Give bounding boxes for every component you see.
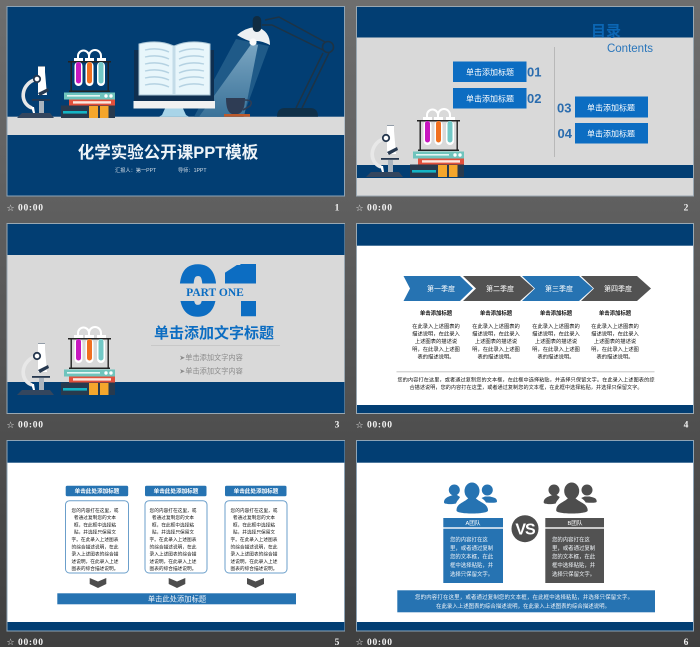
item 01: 01 — [527, 64, 541, 80]
team A card: 框中选择粘贴，并 — [450, 561, 494, 569]
big number 01: 0 — [179, 253, 217, 329]
column B: 的综合描述说明，在此 — [150, 543, 197, 550]
footer: slide 3: 3 — [335, 420, 340, 430]
icon: light beam — [194, 39, 269, 117]
team B card — [545, 518, 604, 583]
footer band — [8, 622, 344, 630]
column 4: 描述说明，在此录入 — [591, 330, 640, 338]
column C: 的综合描述说明，在此 — [231, 543, 278, 550]
bottom summary bar: 您的内容打在这里，或者通过复制您的文本框，在此框中选择粘贴，并选择只保留文字。 — [415, 593, 633, 601]
item 04: 单击添加标题 — [587, 128, 635, 138]
footer: slide 1: ☆ — [6, 204, 15, 214]
chevron 2: 第二季度 — [486, 284, 514, 293]
column A: 者通过复制您的文本 — [74, 514, 116, 521]
item 03: 单击添加标题 — [587, 102, 635, 112]
footer: slide 3: 00:00 — [18, 420, 44, 430]
icon: microscope, test tubes and books — [17, 50, 115, 118]
icon: microscope, test tubes and books — [17, 327, 115, 395]
column B: 图表的综合描述说明。 — [150, 565, 196, 572]
column 4: 上述图表的描述说 — [594, 337, 637, 345]
column A — [66, 486, 128, 588]
column B: 录入上述图表的综合描 — [150, 551, 197, 558]
footer: slide 2: 00:00 — [367, 204, 393, 214]
icon: open book on monitor — [134, 42, 215, 117]
item 04 — [558, 123, 648, 144]
shelf band — [8, 117, 344, 135]
team B card: B团队 — [568, 519, 583, 527]
column B: 者通过复制您的文本 — [152, 514, 194, 521]
chevron 3 — [522, 276, 593, 301]
column 4: 表的描述说明。 — [596, 352, 634, 360]
big number 01: PART ONE — [186, 287, 244, 299]
divider — [151, 345, 280, 346]
divider — [396, 371, 654, 372]
team A card — [443, 518, 503, 583]
summary text: 您的内容打在这里，或者通过复制您的文本框，在此框中选择粘贴，并选择只保留文字。在此录入上述图表的综 — [398, 376, 654, 384]
column B — [145, 486, 207, 588]
chevron 4 — [581, 276, 651, 301]
footer: slide 4 — [356, 420, 689, 431]
column 2 — [472, 309, 521, 360]
column A: 述说明，在此录入上述 — [72, 558, 119, 565]
column C: 录入上述图表的综合描 — [231, 551, 278, 558]
column 1: 表的描述说明。 — [417, 352, 455, 360]
team A card: 您的文本框，在此 — [450, 553, 494, 561]
column C: 贴，并选择只保留文 — [233, 529, 275, 536]
title: contents: 目录 — [591, 23, 621, 40]
title: 化学实验公开课PPT模板 — [78, 142, 259, 162]
column 1: 上述图表的描述说 — [415, 337, 458, 345]
column 2: 明，在此录入上述图 — [472, 345, 520, 353]
column 4: 明，在此录入上述图 — [591, 345, 639, 353]
item 04: 04 — [558, 126, 573, 141]
column 3: 表的描述说明。 — [537, 352, 575, 360]
icon: desk lamp — [237, 16, 334, 117]
column B: 单击此处添加标题 — [154, 487, 199, 495]
footer: slide 3: ☆ — [6, 421, 15, 431]
item 02: 单击添加标题 — [466, 94, 514, 104]
footer: slide 2: ☆ — [356, 204, 364, 214]
bottom bar: 单击此处添加标题 — [148, 594, 207, 604]
column B: 框，在此框中选择粘 — [152, 521, 194, 528]
column A: 录入上述图表的综合描 — [72, 551, 119, 558]
footer: slide 1 — [6, 204, 340, 214]
item 02 — [453, 88, 541, 108]
column 4 — [591, 309, 640, 360]
panel: slide 4 quarters — [356, 224, 694, 414]
column 1: 明，在此录入上述图 — [412, 345, 460, 353]
bullet 2: ➤单击添加文字内容 — [179, 366, 243, 376]
chevron 4: 第四季度 — [604, 284, 632, 293]
icon: microscope, test tubes and books — [366, 109, 464, 177]
team B card: 选择只保留文字。 — [552, 570, 595, 578]
column 1: 描述说明，在此录入 — [412, 330, 461, 338]
column 3: 在此录入上述图表的 — [532, 322, 580, 330]
column A: 字。在此录入上述图表 — [72, 536, 119, 543]
column A: 的综合描述说明，在此 — [72, 543, 119, 550]
footer: slide 2 — [356, 204, 689, 214]
column 2: 描述说明，在此录入 — [472, 330, 521, 338]
icon: team A people — [444, 482, 497, 514]
team A card: 您的内容打在这 — [450, 536, 488, 544]
footer band — [357, 622, 693, 630]
column A: 单击此处添加标题 — [75, 487, 120, 495]
icon: coffee cup — [224, 98, 251, 117]
footer: slide 4: ☆ — [356, 421, 364, 431]
column A: 贴，并选择只保留文 — [74, 529, 116, 536]
column 4: 在此录入上述图表的 — [591, 322, 639, 330]
VS badge — [512, 515, 538, 542]
footer: slide 4: 00:00 — [367, 420, 393, 430]
bottom bar — [57, 593, 296, 604]
column B: 字。在此录入上述图表 — [150, 536, 197, 543]
column C: 单击此处添加标题 — [234, 487, 279, 495]
big number 01 — [180, 264, 256, 317]
bottom summary bar — [397, 590, 655, 612]
column 3: 上述图表的描述说 — [535, 337, 578, 345]
panel: slide 3 section — [7, 224, 344, 414]
column 4: 单击添加标题 — [599, 309, 632, 317]
summary text: 合描述说明，您的内容打在这里，或者通过复制您的文本框，在此框中选择粘贴，并选择只保留文字。 — [410, 384, 642, 391]
team B card: 您的内容打在这 — [552, 536, 590, 544]
column C: 框，在此框中选择粘 — [233, 521, 275, 528]
panel: slide 1 cover — [7, 6, 344, 196]
column 2: 表的描述说明。 — [477, 352, 515, 360]
section heading: 单击添加文字标题 — [154, 324, 274, 342]
column 1 — [412, 309, 461, 360]
column B: 您的内容打在这里，或 — [150, 507, 197, 514]
chevron 1 — [404, 276, 473, 301]
column A: 框，在此框中选择粘 — [74, 521, 116, 528]
footer band — [357, 405, 693, 413]
column C: 图表的综合描述说明。 — [231, 565, 277, 572]
item 03 — [557, 96, 648, 118]
team B card: 框中选择粘贴，并 — [552, 561, 596, 569]
column 2: 上述图表的描述说 — [475, 337, 518, 345]
column A: 图表的综合描述说明。 — [72, 565, 118, 572]
item 01 — [453, 62, 541, 82]
footer: slide 1: 1 — [335, 204, 340, 214]
footer band — [357, 165, 693, 178]
footer band — [8, 382, 344, 413]
item 03: 03 — [557, 100, 571, 116]
column A: 您的内容打在这里，或 — [72, 507, 119, 514]
column 2: 单击添加标题 — [480, 309, 513, 317]
footer: slide 3 — [6, 420, 340, 431]
column C: 述说明，在此录入上述 — [231, 558, 278, 565]
column 3: 描述说明，在此录入 — [532, 330, 581, 338]
footer: slide 4: 4 — [684, 420, 689, 430]
column 1: 单击添加标题 — [420, 309, 453, 317]
header band — [357, 7, 693, 38]
item 01: 单击添加标题 — [466, 67, 514, 77]
panel: slide 6 versus — [356, 440, 694, 631]
summary text — [398, 376, 654, 391]
header band — [8, 441, 344, 463]
chevron 2 — [463, 276, 534, 301]
header band — [357, 224, 693, 246]
VS badge: VS — [515, 522, 536, 538]
column C: 您的内容打在这里，或 — [231, 507, 278, 514]
teacher text: 导师：1PPT — [178, 166, 207, 174]
divider — [554, 47, 555, 157]
column B: 贴，并选择只保留文 — [152, 529, 194, 536]
column C: 字。在此录入上述图表 — [231, 536, 278, 543]
chevron 3: 第三季度 — [545, 284, 573, 293]
team B card: 里，或者通过复制 — [552, 544, 595, 552]
item 02: 02 — [527, 91, 541, 106]
column C: 者通过复制您的文本 — [233, 514, 275, 521]
footer: slide 2: 2 — [684, 204, 689, 214]
team A card: 选择只保留文字。 — [450, 570, 493, 578]
subtitle: contents: Contents — [607, 43, 653, 55]
team A card: A团队 — [466, 519, 481, 527]
header band — [357, 441, 693, 463]
bullet 1: ➤单击添加文字内容 — [179, 353, 243, 362]
big number 01: 1 — [221, 253, 259, 329]
column 2: 在此录入上述图表的 — [472, 322, 520, 330]
column B: 述说明，在此录入上述 — [150, 558, 197, 565]
header band — [8, 224, 344, 255]
column 3 — [532, 309, 581, 360]
chevron 1: 第一季度 — [427, 284, 455, 293]
bottom summary bar: 在此录入上述图表的综合描述说明，在此录入上述图表的综合描述说明。 — [436, 602, 610, 610]
footer: slide 1: 00:00 — [18, 204, 44, 214]
column 3: 单击添加标题 — [540, 309, 573, 317]
footer: slide 5 — [6, 638, 340, 647]
column 1: 在此录入上述图表的 — [412, 322, 460, 330]
panel: slide 2 contents — [356, 6, 694, 196]
presenter text: 汇报人：第一PPT — [115, 166, 157, 174]
team A card: 里，或者通过复制 — [450, 544, 493, 552]
footer: slide 6 — [356, 638, 689, 647]
panel: slide 5 three columns — [7, 440, 344, 631]
team B card: 您的文本框，在此 — [552, 553, 596, 561]
column 3: 明，在此录入上述图 — [532, 345, 580, 353]
column C — [225, 486, 287, 588]
icon: team B people — [544, 482, 597, 514]
